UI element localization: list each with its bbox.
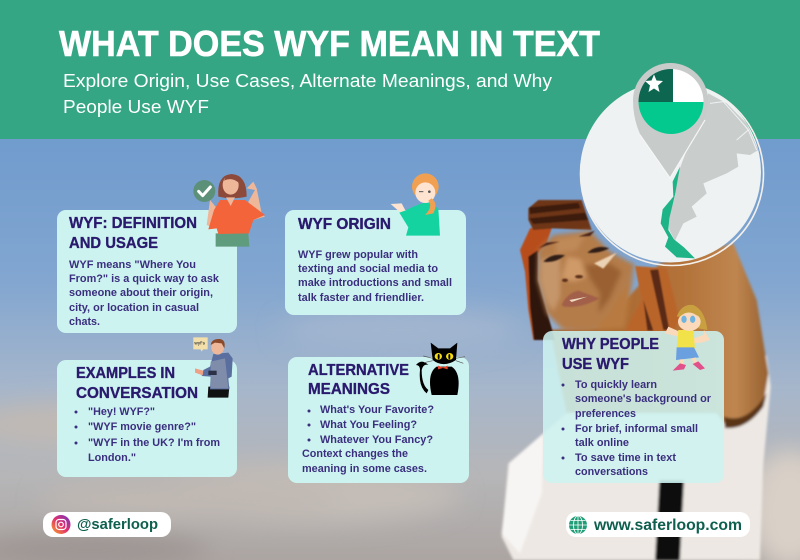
heading: examples: CONVERSATION: [76, 385, 198, 402]
hair wrap: [528, 200, 592, 230]
teeth: [569, 297, 587, 302]
lips: [562, 291, 599, 307]
body, shirt and arm: [502, 243, 771, 560]
heading: why people: USE WYF: [562, 356, 629, 373]
list: reasons: preferences: [575, 408, 636, 420]
brows: [538, 231, 595, 248]
hair back: [520, 223, 555, 340]
heading: origin: WYF ORIGIN: [298, 216, 391, 233]
list: alternative meanings: meaning in some cases.: [302, 463, 427, 475]
map pin: [633, 63, 708, 178]
heading: alternative meanings: MEANINGS: [308, 381, 390, 398]
panel: definition and usage: [57, 210, 237, 333]
header band: [0, 0, 800, 139]
title: WHAT DOES WYF MEAN IN TEXT: [59, 23, 600, 64]
heading: why people: [562, 336, 659, 373]
subtitle: [63, 70, 553, 117]
list: examples: "WYF movie genre?": [88, 421, 196, 433]
subtitle: Explore Origin, Use Cases, Alternate Meanings, and Why: [63, 70, 553, 91]
heading: examples: [76, 365, 198, 402]
badge: website: [566, 512, 750, 537]
list: reasons: For brief, informal small: [575, 423, 698, 435]
list: examples: "Hey! WYF?": [88, 406, 155, 418]
text: definition body: chats.: [69, 316, 100, 328]
list: alternative meanings: [302, 404, 434, 475]
nostrils: [562, 279, 568, 282]
cheek highlight: [594, 253, 617, 269]
list: alternative meanings: Context changes the: [302, 448, 408, 460]
list: reasons: talk online: [575, 437, 629, 449]
list: reasons: [562, 379, 712, 478]
globe disc: [580, 82, 764, 266]
list: reasons: To quickly learn: [575, 379, 657, 391]
icon: man with speech bubble: [193, 337, 233, 398]
heading: definition: WYF: DEFINITION: [69, 215, 197, 232]
text: definition body: [69, 259, 220, 328]
map globe with location pin: [580, 63, 764, 266]
neck light: [593, 268, 634, 331]
flag in pin: [638, 69, 704, 134]
heading: alternative meanings: [308, 362, 409, 398]
icon: woman with check mark: [193, 174, 265, 247]
panel: why people use WYF: [543, 331, 724, 483]
text: definition body: city, or location in casual: [69, 302, 199, 314]
badge: instagram handle: [43, 512, 171, 537]
icon: black cat: [416, 343, 465, 395]
badge: website: www.saferloop.com: [593, 517, 742, 534]
panel: alternative meanings: [288, 357, 469, 483]
icon: man with speech bubble: wyf's: [193, 341, 206, 346]
icon: globe: [569, 516, 587, 534]
list: alternative meanings: Whatever You Fancy?: [320, 434, 433, 446]
head and hair: [520, 200, 679, 340]
text: definition body: From?" is a quick way to ask: [69, 273, 220, 285]
list: alternative meanings: What You Feeling?: [320, 419, 417, 431]
heading: why people: WHY PEOPLE: [562, 336, 659, 353]
icon: instagram: [52, 515, 70, 534]
text: origin body: talk faster and friendlier.: [298, 292, 424, 304]
text: origin body: texting and social media to: [298, 263, 438, 275]
list: reasons: conversations: [575, 466, 648, 478]
text: origin body: [298, 249, 452, 304]
icon: shrugging cartoon girl: [665, 305, 710, 371]
heading: examples: EXAMPLES IN: [76, 365, 175, 382]
eyes: [543, 255, 565, 262]
nose highlight: [562, 257, 586, 282]
subtitle: People Use WYF: [63, 96, 209, 117]
icon: winking girl pointing: [391, 173, 440, 236]
text: definition body: someone about their origin,: [69, 287, 213, 299]
text: origin body: make introductions and small: [298, 277, 452, 289]
text: definition body: WYF means "Where You: [69, 259, 196, 271]
heading: definition: AND USAGE: [69, 235, 158, 252]
list: alternative meanings: What's Your Favorite?: [320, 404, 434, 416]
background: sky with clouds: [0, 130, 800, 560]
list: examples: [74, 406, 220, 464]
photo: woman reaching up: [502, 200, 771, 560]
badge: instagram handle: @saferloop: [77, 516, 158, 533]
list: examples: London.": [88, 452, 136, 464]
map of South America and Chile: [661, 93, 758, 258]
panel: examples in conversation: [57, 360, 237, 477]
list: reasons: To save time in text: [575, 452, 676, 464]
hair right: [625, 266, 679, 333]
list: examples: "WYF in the UK? I'm from: [88, 437, 220, 449]
panel: origin: [285, 210, 466, 315]
list: reasons: someone's background or: [575, 393, 712, 405]
face: [537, 231, 635, 332]
heading: alternative meanings: ALTERNATIVE: [308, 362, 409, 379]
heading: definition: [69, 215, 197, 252]
text: origin body: WYF grew popular with: [298, 249, 418, 261]
